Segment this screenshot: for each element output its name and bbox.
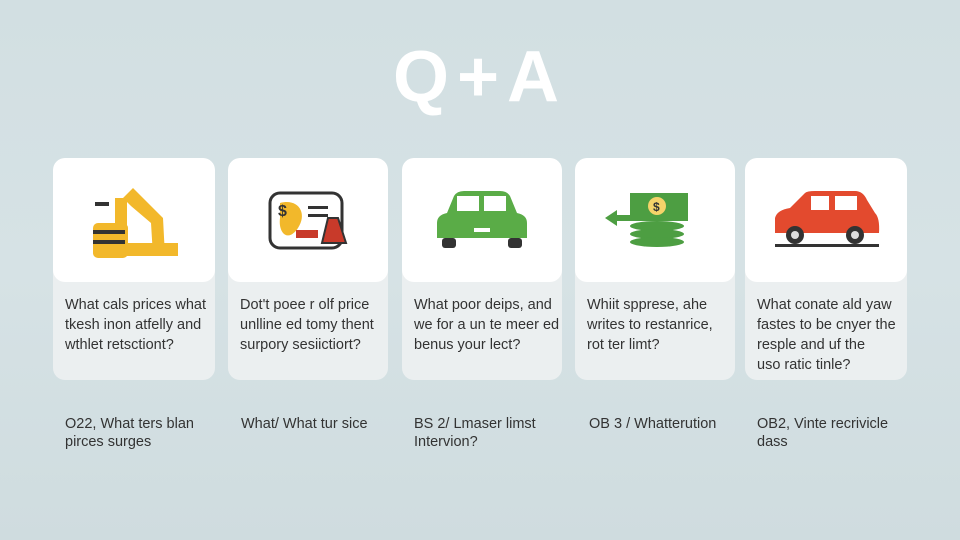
caption 5 [757, 416, 888, 450]
question 2: unlline ed tomy thent [240, 317, 374, 333]
question 1 [65, 297, 206, 353]
card 4 [575, 158, 735, 380]
caption 4: OB 3 / Whatterution [589, 416, 716, 432]
caption 1 [65, 416, 194, 450]
question 2: surpory sesiictiort? [240, 337, 361, 353]
question 3: benus your lect? [414, 337, 520, 353]
icon: oil pump [93, 188, 178, 258]
question 2: Dot't poee r olf price [240, 297, 369, 313]
caption 3 [414, 416, 536, 450]
caption 1: pirces surges [65, 434, 151, 450]
question 1: tkesh inon atfelly and [65, 317, 201, 333]
question 5 [757, 297, 896, 373]
card 3 [402, 158, 562, 380]
question 5: fastes to be cnyer the [757, 317, 896, 333]
question 1: What cals prices what [65, 297, 206, 313]
card 5 [745, 158, 907, 380]
card 1 [53, 158, 215, 380]
icon: red car [775, 191, 880, 247]
caption 3: BS 2/ Lmaser limst [414, 416, 536, 432]
question 4: rot ter limt? [587, 337, 660, 353]
question 4: writes to restanrice, [587, 317, 713, 333]
caption 2: What/ What tur sice [241, 416, 368, 432]
icon: price board [268, 192, 348, 250]
icon: green car [437, 191, 527, 248]
question 3: What poor deips, and [414, 297, 552, 313]
caption 5: dass [757, 434, 788, 450]
icon: money stack [605, 193, 688, 247]
question 3 [414, 297, 559, 353]
caption 5: OB2, Vinte recrivicle [757, 416, 888, 432]
question 3: we for a un te meer ed [414, 317, 559, 333]
icon: money stack: $ [653, 200, 660, 214]
title: Q+A [393, 37, 567, 117]
question 5: uso ratic tinle? [757, 357, 850, 373]
question 5: What conate ald yaw [757, 297, 892, 313]
question 4: Whiit spprese, ahe [587, 297, 707, 313]
question 1: wthlet retsctiont? [65, 337, 174, 353]
question 2 [240, 297, 374, 353]
caption 3: Intervion? [414, 434, 478, 450]
icon: price board: $ [278, 203, 287, 220]
card 2 [228, 158, 388, 380]
question 4 [587, 297, 713, 353]
question 5: resple and uf the [757, 337, 865, 353]
caption 1: O22, What ters blan [65, 416, 194, 432]
